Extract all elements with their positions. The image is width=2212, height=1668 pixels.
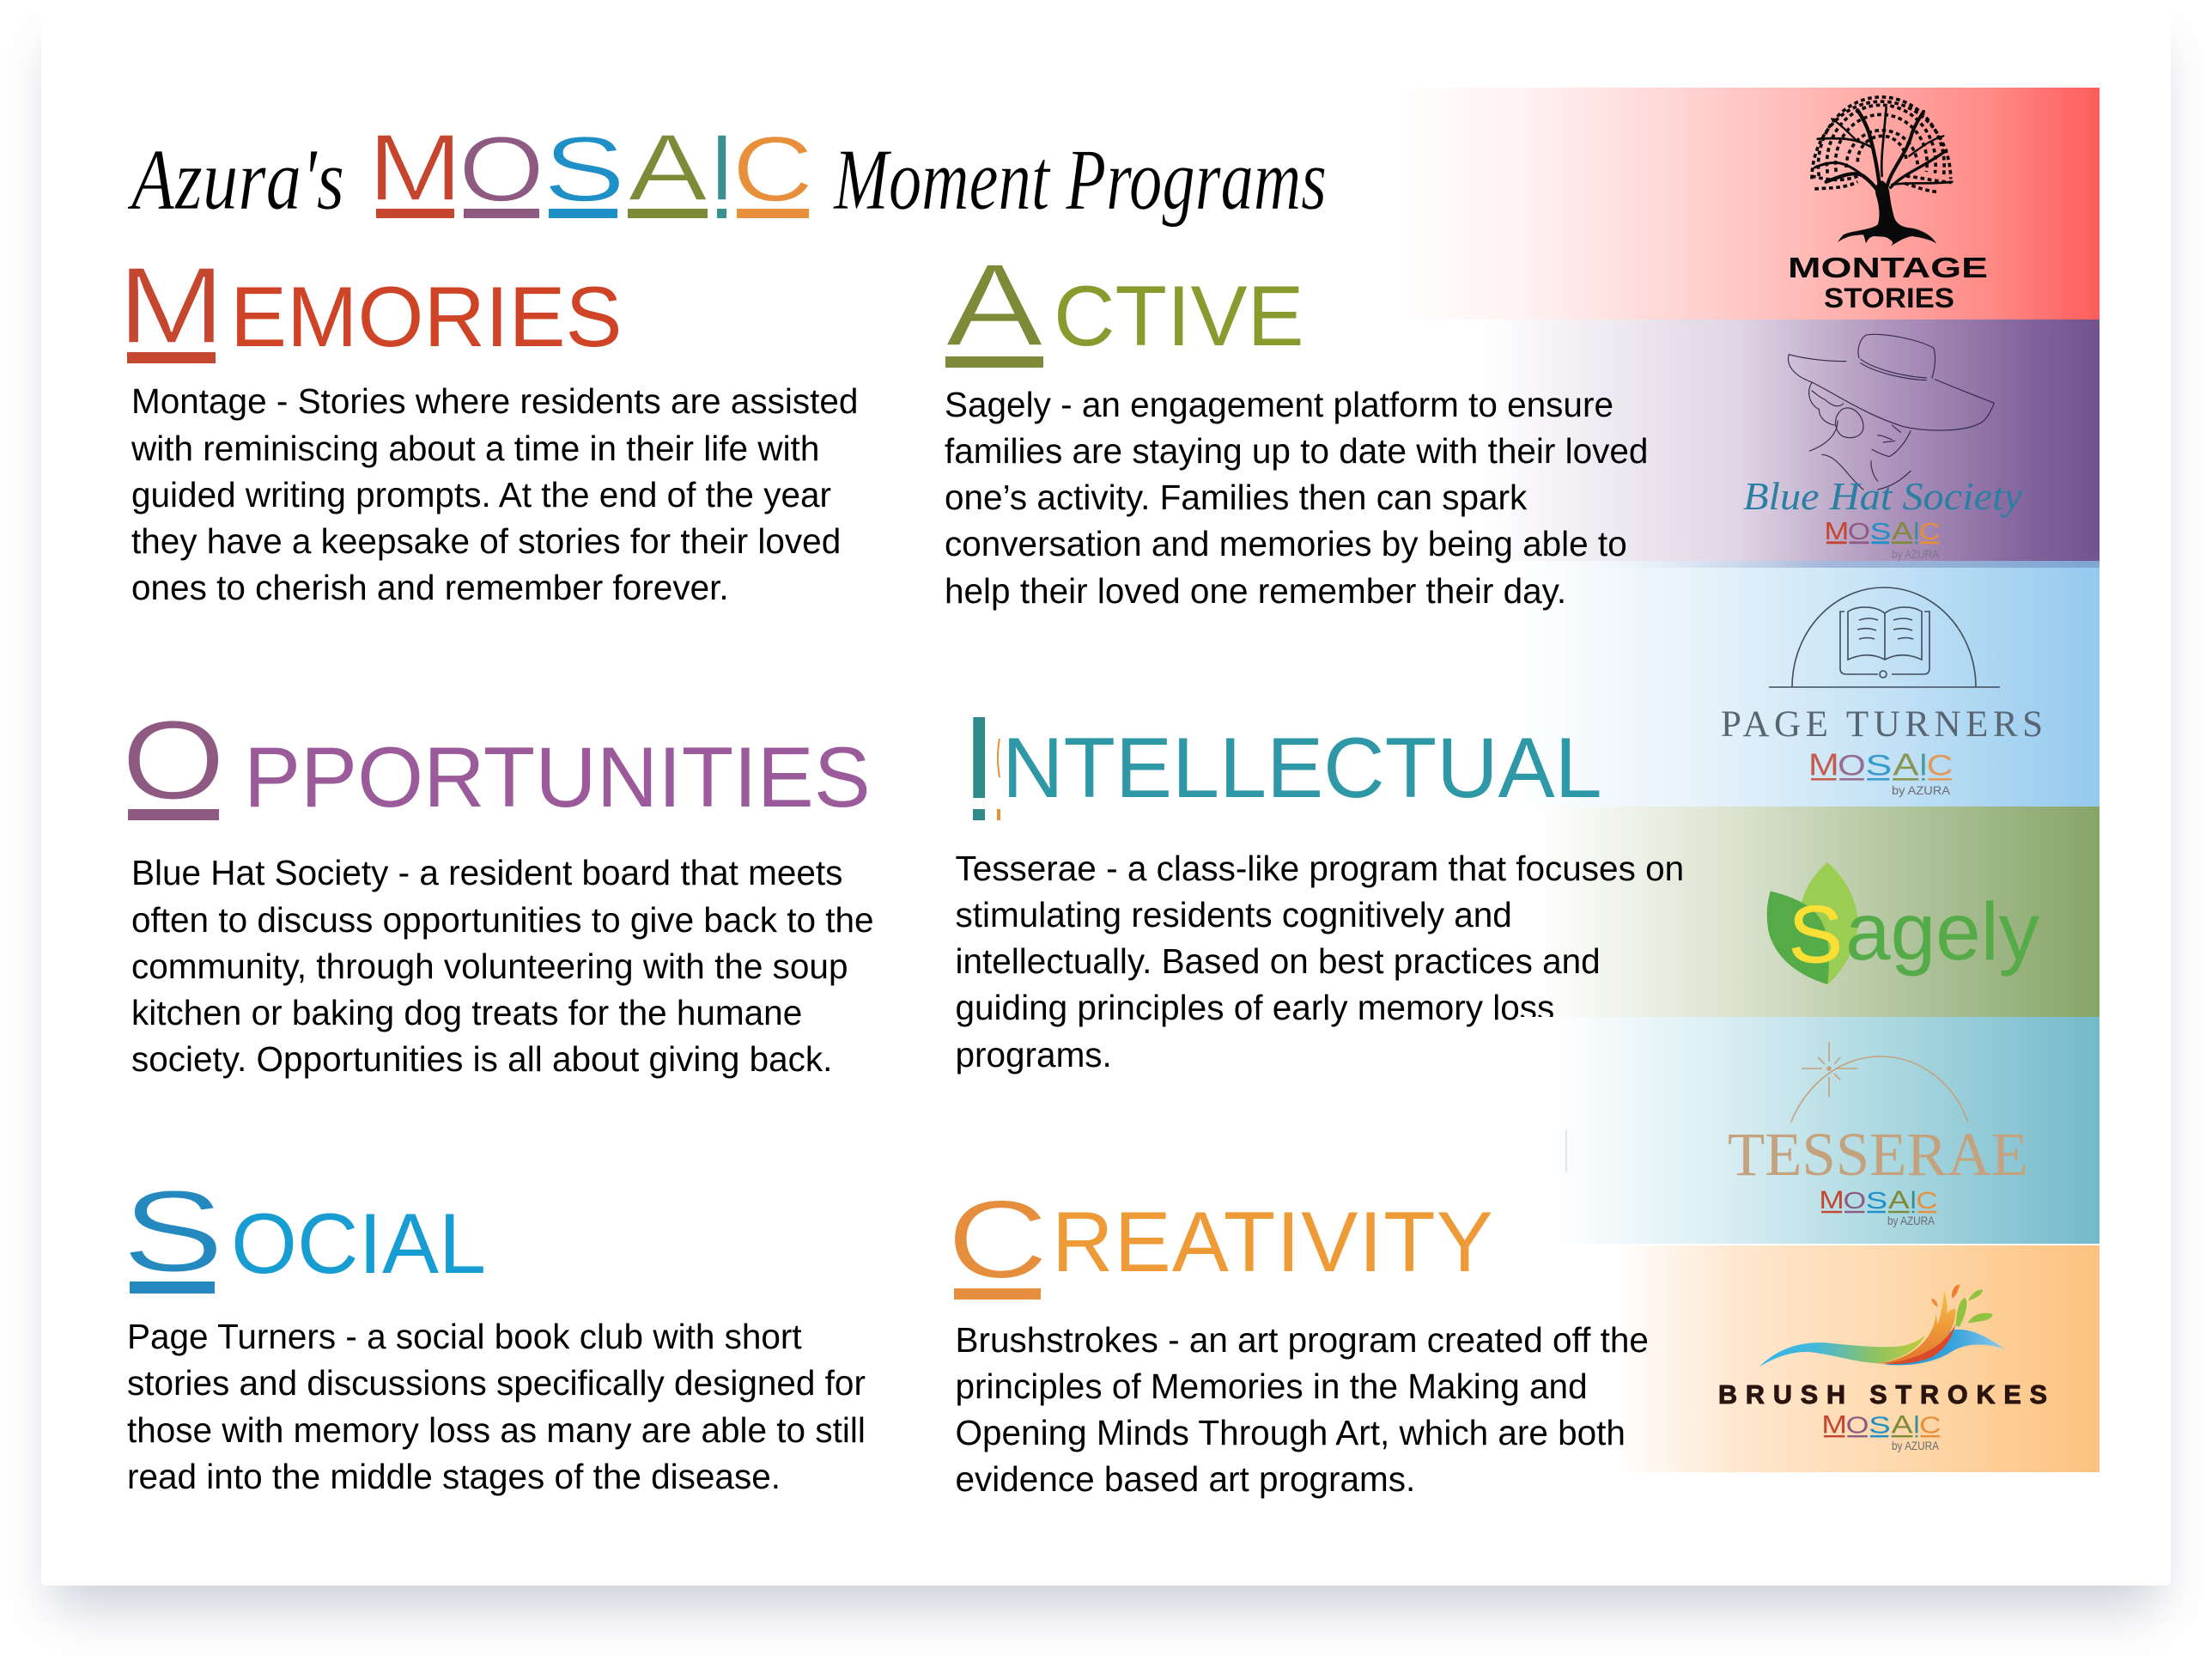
text: creativity description: evidence based art programs. bbox=[955, 1459, 1415, 1499]
text: active description: help their loved one remember their day. bbox=[945, 571, 1566, 611]
text: intellectual description: intellectually. Based on best practices and bbox=[955, 941, 1601, 981]
logo: mini mosaic: O bbox=[1846, 1410, 1869, 1439]
text: social description: stories and discussions specifically designed for bbox=[127, 1363, 866, 1403]
heading: Social: S bbox=[122, 1166, 224, 1296]
section: opportunities bbox=[122, 697, 874, 1079]
heading: Social: OCIAL bbox=[231, 1196, 486, 1291]
text: active description: conversation and memories by being able to bbox=[945, 524, 1627, 563]
logo: mini mosaic bbox=[1819, 1186, 1938, 1214]
logo: mini mosaic: A bbox=[1893, 747, 1919, 782]
logo text: TESSERAE: TESSERAE bbox=[1728, 1120, 2028, 1189]
text: memories description: they have a keepsake of stories for their loved bbox=[131, 521, 841, 561]
icon: tree bbox=[1812, 97, 1952, 247]
heading: Memories: EMORIES bbox=[230, 269, 623, 364]
logo: mini mosaic bbox=[1824, 516, 1940, 545]
logo: mini mosaic: S bbox=[1870, 518, 1892, 545]
heading: Opportunities: PPORTUNITIES bbox=[244, 729, 871, 825]
text: memories description bbox=[131, 381, 858, 607]
logo: mini mosaic: M bbox=[1824, 517, 1849, 545]
logo: tesserae bbox=[1728, 1042, 2028, 1227]
title: Moment Programs: Moment Programs bbox=[832, 131, 1327, 228]
panel: brush strokes background bbox=[1614, 1245, 2100, 1472]
heading: Active: CTIVE bbox=[1054, 268, 1304, 363]
heading: Opportunities: O bbox=[122, 697, 225, 823]
text: opportunities description: society. Opportunities is all about giving back. bbox=[131, 1039, 832, 1079]
heading: Memories: M bbox=[118, 245, 225, 366]
logo text: by Azura: by AZURA bbox=[1887, 1214, 1936, 1227]
text: intellectual description: programs. bbox=[955, 1035, 1112, 1074]
text: social description: Page Turners - a social book club with short bbox=[127, 1317, 802, 1356]
logo: mini mosaic: O bbox=[1843, 1187, 1866, 1214]
panel: tesserae background bbox=[1516, 1017, 2100, 1244]
icon: leaves bbox=[1767, 862, 1857, 984]
heading: Active: A bbox=[945, 239, 1043, 370]
panel: page turners background bbox=[1511, 561, 2100, 807]
text: memories description: with reminiscing about a time in their life with bbox=[131, 429, 819, 468]
logo text: STORIES: STORIES bbox=[1824, 283, 1954, 314]
logo: mini mosaic bbox=[1808, 747, 1954, 782]
icon: woman in hat bbox=[1789, 334, 1994, 490]
logo text: Blue Hat Society: Blue Hat Society bbox=[1743, 474, 2023, 518]
panel: sagely background bbox=[1537, 807, 2100, 1017]
logo text: by Azura: by AZURA bbox=[1892, 547, 1940, 561]
section: memories bbox=[118, 245, 858, 607]
logo text: S: S bbox=[1789, 889, 1843, 979]
title bbox=[127, 114, 1327, 228]
logo: mini mosaic: M bbox=[1808, 748, 1839, 782]
heading: Intellectual bbox=[962, 692, 1602, 824]
logo: mini mosaic: I bbox=[1919, 748, 1928, 782]
logo text: agely: agely bbox=[1845, 886, 2039, 977]
icon: arc and star bbox=[1791, 1042, 1968, 1122]
heading: Active bbox=[945, 239, 1304, 370]
logo text: MONTAGE: MONTAGE bbox=[1788, 253, 1988, 284]
panel: blue hat society background bbox=[1477, 320, 2100, 561]
logo: mini mosaic: O bbox=[1848, 519, 1870, 545]
section: active bbox=[945, 239, 1648, 611]
text: memories description: ones to cherish and remember forever. bbox=[131, 568, 729, 607]
logo: mini mosaic: I bbox=[1910, 1187, 1917, 1214]
logo: mini mosaic: M bbox=[1819, 1186, 1844, 1214]
title: MOSAIC logo: A bbox=[628, 114, 708, 221]
text: opportunities description bbox=[131, 853, 874, 1079]
heading: Creativity: REATIVITY bbox=[1052, 1194, 1494, 1289]
heading: Intellectual: NTELLECTUAL bbox=[1002, 720, 1602, 815]
logo: mini mosaic: C bbox=[1916, 1187, 1938, 1214]
logo: mini mosaic: C bbox=[1927, 750, 1954, 782]
icon: paint splash wave bbox=[1759, 1285, 2005, 1367]
text: social description: read into the middle stages of the disease. bbox=[127, 1457, 781, 1496]
text: creativity description bbox=[955, 1320, 1649, 1499]
text: opportunities description: Blue Hat Society - a resident board that meets bbox=[131, 853, 842, 892]
text: memories description: guided writing prompts. At the end of the year bbox=[131, 475, 831, 514]
text: active description: families are staying up to date with their loved bbox=[945, 431, 1648, 471]
title: MOSAIC logo: C bbox=[732, 117, 814, 221]
logo: mini mosaic: I bbox=[1912, 517, 1920, 545]
text: intellectual description bbox=[955, 849, 1684, 1074]
heading: Creativity bbox=[947, 1178, 1494, 1302]
logo: mini mosaic: O bbox=[1838, 749, 1866, 782]
text: social description bbox=[127, 1317, 866, 1496]
text: active description: Sagely - an engagement platform to ensure bbox=[945, 385, 1613, 424]
title: MOSAIC logo: M bbox=[368, 114, 463, 221]
logo: mini mosaic: A bbox=[1888, 1187, 1910, 1214]
text: creativity description: principles of Memories in the Making and bbox=[955, 1367, 1588, 1406]
logo: montage stories bbox=[1788, 97, 1988, 314]
icon: book under dome bbox=[1769, 587, 2000, 687]
title: MOSAIC logo: I bbox=[708, 115, 736, 221]
logo: mini mosaic: S bbox=[1865, 749, 1892, 782]
logo: blue hat society bbox=[1743, 334, 2023, 561]
text: opportunities description: community, through volunteering with the soup bbox=[131, 947, 848, 986]
section: social bbox=[122, 1166, 866, 1496]
text: intellectual description: guiding principles of early memory loss bbox=[955, 988, 1554, 1027]
logo text: PAGE TURNERS: PAGE TURNERS bbox=[1721, 704, 2043, 745]
logo: mini mosaic: C bbox=[1919, 1411, 1942, 1439]
text: social description: those with memory loss as many are able to still bbox=[127, 1410, 866, 1450]
text: creativity description: Opening Minds Through Art, which are both bbox=[955, 1413, 1626, 1452]
logo: mini mosaic bbox=[1821, 1409, 1942, 1439]
panel: montage background bbox=[1382, 88, 2100, 320]
logo: mini mosaic: S bbox=[1866, 1188, 1887, 1214]
title: MOSAIC logo: O bbox=[459, 118, 544, 222]
text: intellectual description: stimulating residents cognitively and bbox=[955, 895, 1512, 934]
text: memories description: Montage - Stories where residents are assisted bbox=[131, 381, 858, 421]
logo: mini mosaic: I bbox=[1913, 1411, 1920, 1439]
logo: mini mosaic: A bbox=[1892, 516, 1913, 545]
logo text: by Azura: by AZURA bbox=[1892, 783, 1951, 797]
logo text: BRUSH STROKES: BRUSH STROKES bbox=[1718, 1380, 2047, 1409]
logo: mini mosaic: M bbox=[1821, 1409, 1847, 1439]
section: intellectual bbox=[955, 692, 1684, 1074]
title: MOSAIC logo bbox=[368, 114, 814, 222]
text: opportunities description: kitchen or baking dog treats for the humane bbox=[131, 993, 802, 1032]
logo: mini mosaic: C bbox=[1919, 518, 1940, 545]
section: creativity bbox=[947, 1178, 1649, 1499]
title: Azura's: Azura's bbox=[127, 131, 344, 228]
logo: mini mosaic: A bbox=[1892, 1411, 1913, 1439]
logo: mini mosaic: S bbox=[1869, 1411, 1891, 1439]
heading: Intellectual: I bbox=[962, 692, 997, 824]
text: active description: one’s activity. Families then can spark bbox=[945, 478, 1528, 517]
text: active description bbox=[945, 385, 1648, 611]
text: intellectual description: Tesserae - a class-like program that focuses on bbox=[955, 849, 1684, 888]
heading: Creativity: C bbox=[947, 1178, 1048, 1302]
heading: Social bbox=[122, 1166, 486, 1296]
logo: page turners bbox=[1721, 587, 2043, 797]
heading: Opportunities bbox=[122, 697, 871, 825]
text: opportunities description: often to discuss opportunities to give back to the bbox=[131, 900, 874, 940]
logo: sagely bbox=[1767, 862, 2039, 984]
title: MOSAIC logo: S bbox=[543, 117, 625, 221]
heading: Memories bbox=[118, 245, 623, 366]
text: creativity description: Brushstrokes - an art program created off the bbox=[955, 1320, 1649, 1360]
logo text: by Azura: by AZURA bbox=[1892, 1439, 1940, 1452]
logo: brush strokes bbox=[1718, 1285, 2047, 1452]
